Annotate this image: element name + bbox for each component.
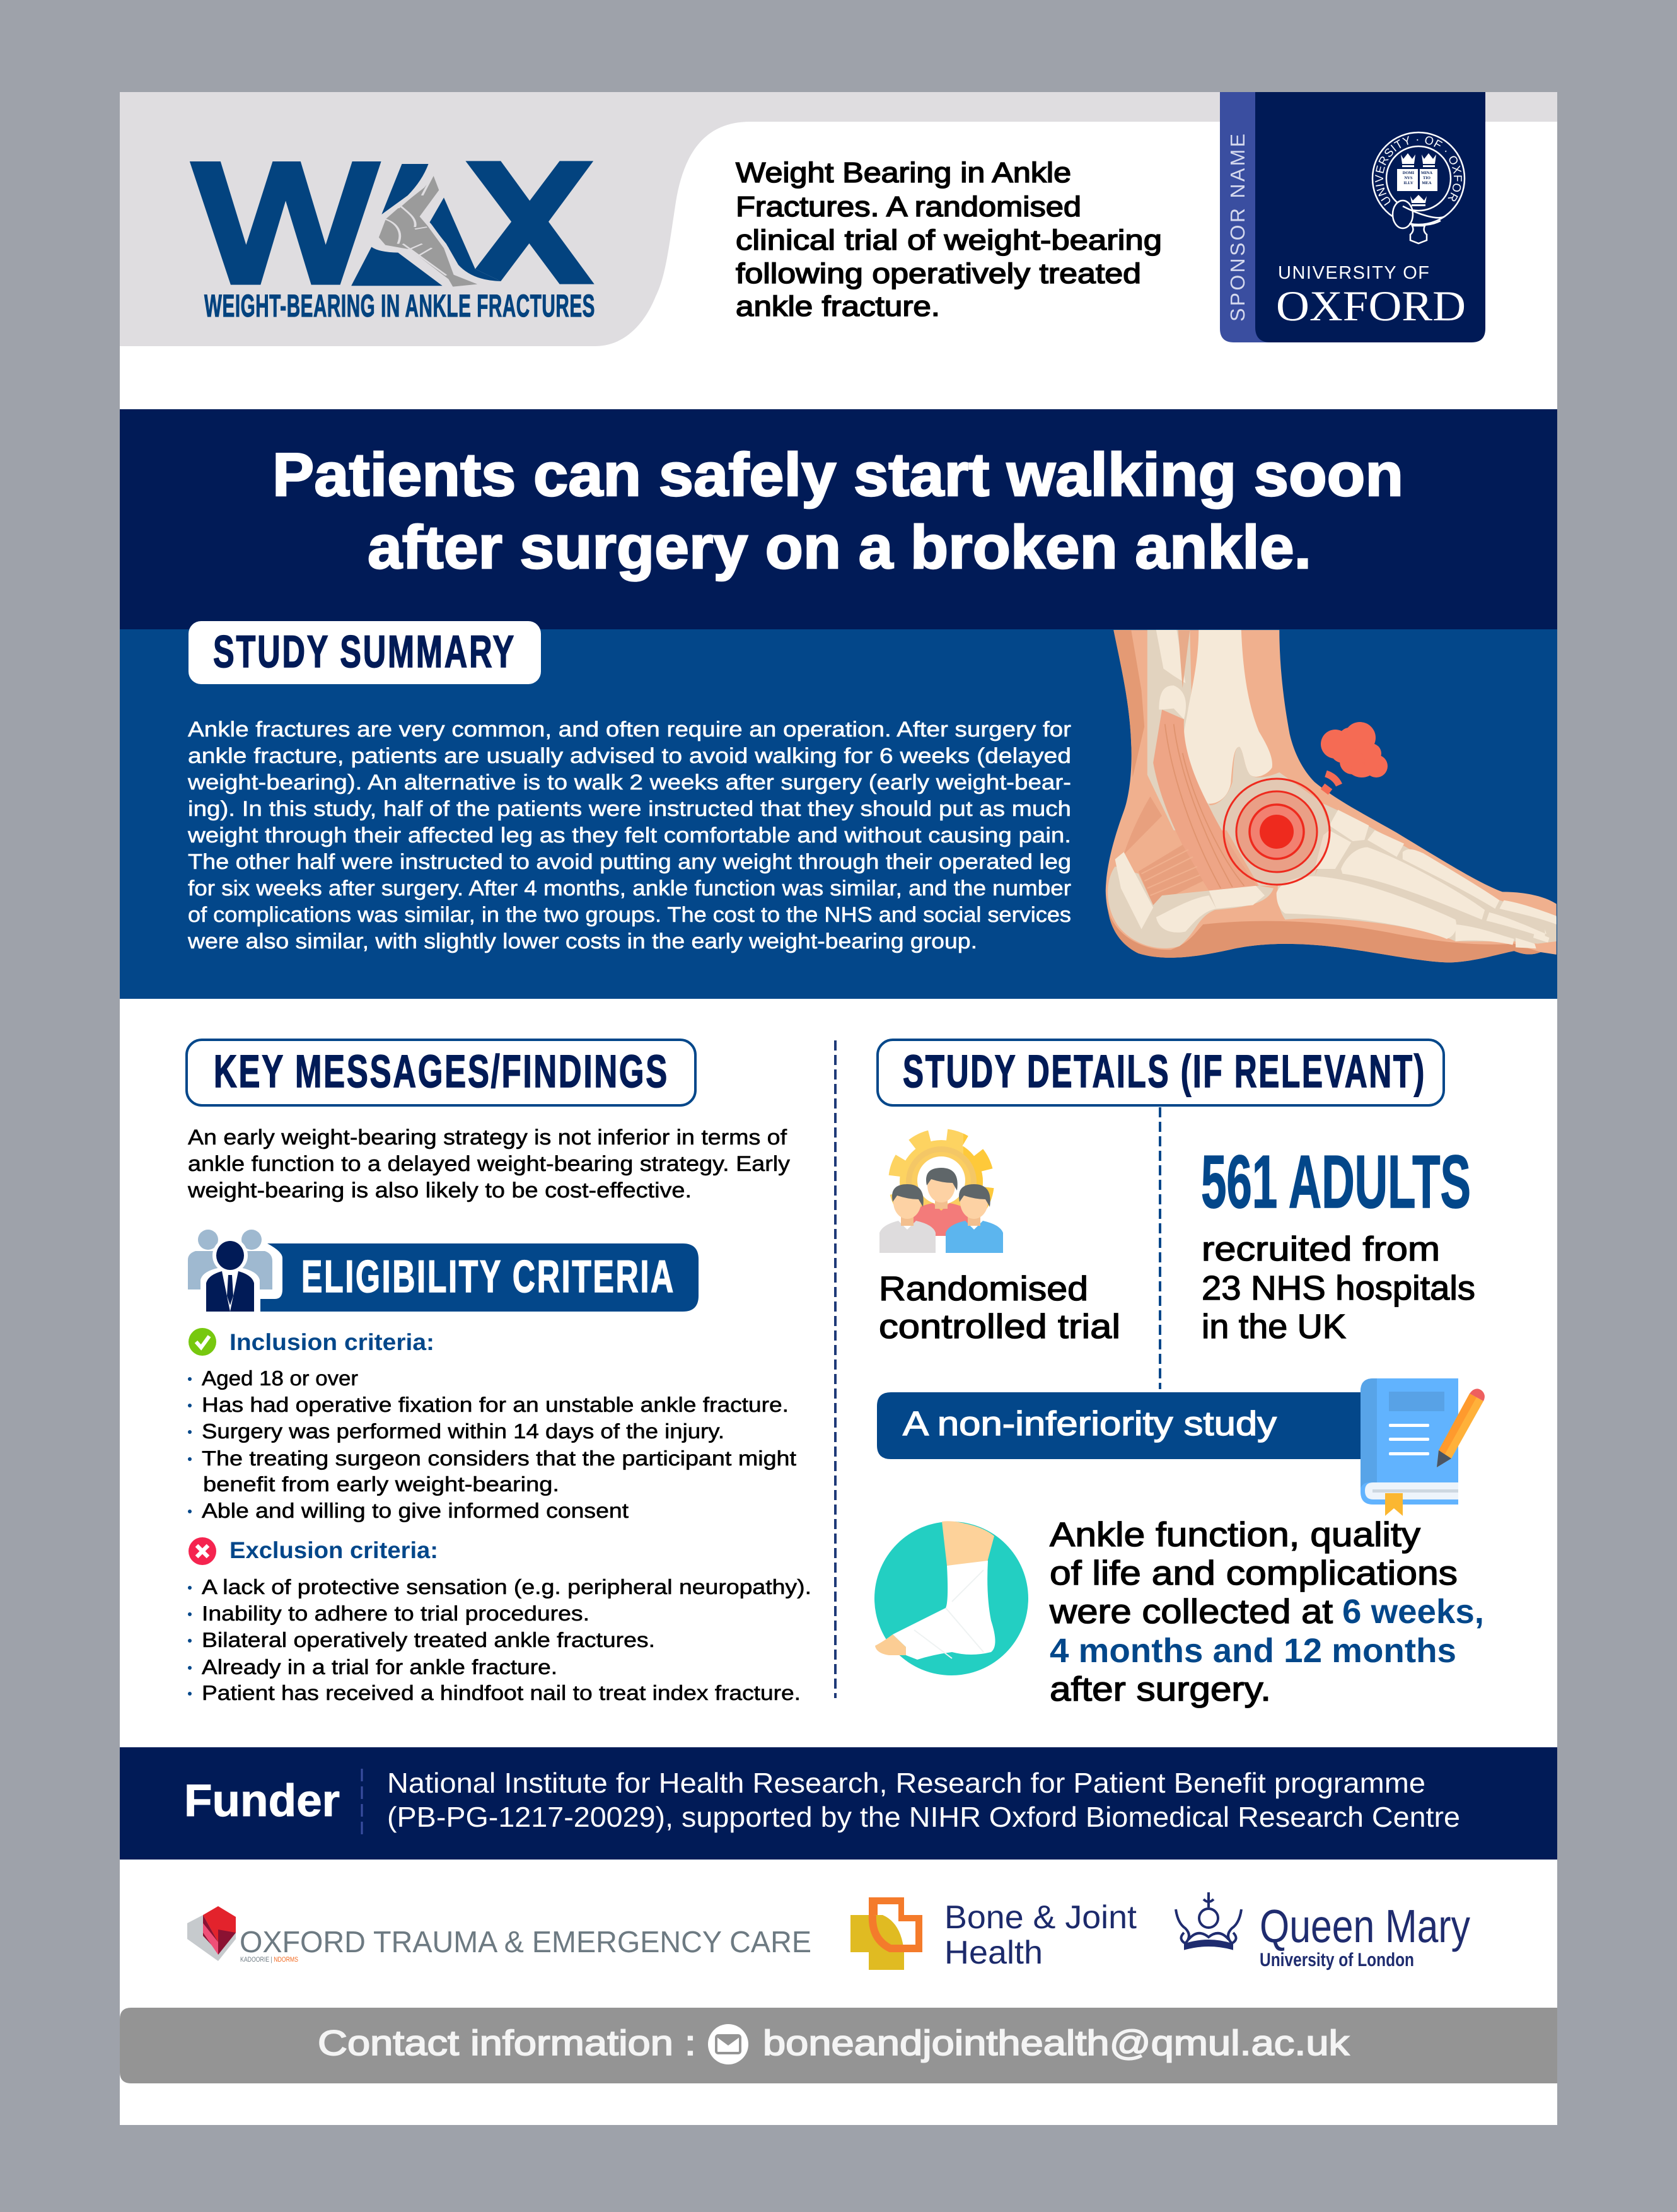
funder details: National Institute for Health Research, Research for Patient Benefit programme: [387, 1767, 1425, 1799]
icon: email: [708, 2024, 748, 2064]
inclusion criteria list: Able and willing to give informed consent: [202, 1499, 629, 1522]
pain cloud: [1321, 722, 1388, 792]
summary paragraph: were also similar, with slightly lower costs in the early weight-bearing group.: [187, 929, 977, 953]
summary paragraph: [187, 718, 1071, 953]
Oxford crest: MINA: [1421, 171, 1432, 175]
exclusion criteria heading: Exclusion criteria:: [229, 1537, 438, 1563]
study details heading: STUDY DETAILS (IF RELEVANT): [903, 1046, 1426, 1097]
inclusion criteria list: Surgery was performed within 14 days of the injury.: [202, 1419, 724, 1443]
QM crest: [1176, 1892, 1241, 1948]
recruitment text: 23 NHS hospitals: [1202, 1269, 1475, 1307]
funder details: (PB-PG-1217-20029), supported by the NIHR Oxford Biomedical Research Centre: [387, 1801, 1460, 1833]
summary paragraph: of complications was similar, in the two groups. The cost to the NHS and social services: [188, 903, 1071, 927]
trial title text: ankle fracture.: [736, 290, 940, 322]
icon: people group: [188, 1230, 272, 1315]
exclusion criteria list: Already in a trial for ankle fracture.: [202, 1655, 557, 1679]
recruitment text: recruited from: [1202, 1230, 1440, 1268]
eligibility criteria heading: [188, 1230, 699, 1315]
icon: bandaged ankle: [874, 1521, 1028, 1675]
sponsor name label: SPONSOR NAME: [1226, 134, 1249, 322]
key messages heading: KEY MESSAGES/FINDINGS: [214, 1046, 669, 1097]
header band: [120, 92, 1557, 346]
Oxford crest: TIO: [1423, 176, 1430, 180]
logo subtitle: WEIGHT-BEARING IN ANKLE FRACTURES: [204, 288, 595, 323]
summary background: [120, 629, 1557, 999]
exclusion criteria list: Inability to adhere to trial procedures.: [202, 1602, 589, 1625]
pain target rings: [1224, 779, 1330, 885]
summary paragraph: weight through their affected leg as they felt comfortable and without causing pain.: [187, 824, 1071, 847]
logo: Bone and Joint Health: [850, 1897, 1137, 1971]
outcomes text: 6 weeks,: [1342, 1593, 1484, 1631]
gear: [895, 1136, 987, 1228]
University of London wordmark: University of London: [1260, 1950, 1414, 1970]
white card: [120, 92, 1557, 2125]
stat: 561 adults: 561 ADULTS: [1201, 1140, 1471, 1224]
funder details: [387, 1767, 1460, 1833]
inclusion criteria list: benefit from early weight-bearing.: [203, 1472, 559, 1496]
Oxford crest: NVS: [1404, 176, 1413, 180]
non-inferiority banner: [877, 1392, 1368, 1459]
study summary panel: [120, 621, 1557, 999]
logo: Bone and Joint Health: Health: [944, 1935, 1043, 1971]
trial type label: [879, 1270, 1120, 1346]
exclusion criteria list: A lack of protective sensation (e.g. peripheral neuropathy).: [202, 1575, 811, 1598]
logo leg bones: [376, 172, 482, 288]
trial title text: following operatively treated: [736, 257, 1141, 289]
funder panel: [120, 1747, 1557, 1860]
eligibility bar: [260, 1243, 699, 1312]
recruitment text: in the UK: [1202, 1308, 1346, 1346]
logo letters: [190, 161, 595, 286]
foot anatomy illustration: [1106, 630, 1557, 962]
summary paragraph: weight-bearing). An alternative is to walk 2 weeks after surgery (early weight-bear-: [187, 771, 1071, 795]
exclusion criteria list: Bilateral operatively treated ankle fractures.: [202, 1628, 655, 1651]
trial type label: Randomised: [879, 1270, 1088, 1308]
centre person: [914, 1168, 969, 1236]
cross mark: [850, 1897, 922, 1970]
outcomes text: of life and complications: [1050, 1554, 1458, 1592]
Oxford crest: ILLV: [1403, 181, 1413, 185]
summary paragraph: for six weeks after surgery. After 4 months, ankle function was similar, and the number: [188, 876, 1071, 900]
bandage: [893, 1561, 995, 1660]
OTEC subtext: KADOORIE | NDORMS: [240, 1956, 298, 1964]
university of label: UNIVERSITY OF: [1278, 263, 1429, 283]
recruitment text: [1202, 1230, 1475, 1346]
study summary badge: [189, 621, 541, 684]
inclusion criteria list: Has had operative fixation for an unstable ankle fracture.: [202, 1393, 789, 1416]
details divider: [1159, 1107, 1161, 1389]
icon: red cross: [189, 1537, 216, 1565]
key messages text: weight-bearing is also likely to be cost-effective.: [187, 1179, 692, 1202]
Bone and Joint wordmark: Bone & Joint: [944, 1899, 1137, 1936]
outcomes text: were collected at: [1049, 1593, 1333, 1631]
summary paragraph: ing). In this study, half of the patients were instructed that they should put as much: [188, 797, 1071, 821]
trial title text: clinical trial of weight-bearing: [736, 224, 1162, 256]
outcomes text: 4 months and 12 months: [1050, 1632, 1456, 1670]
contact bar: [120, 2008, 1557, 2083]
eligibility title: ELIGIBILITY CRITERIA: [301, 1252, 675, 1302]
toes: [875, 1634, 906, 1655]
sponsor panel: University of Oxford: [1220, 92, 1485, 342]
hexagon mark: [187, 1906, 236, 1961]
WAX logo: [190, 161, 595, 323]
outcomes text: after surgery.: [1050, 1670, 1271, 1708]
Oxford wordmark: OXFORD: [1276, 282, 1466, 330]
left person: [879, 1184, 936, 1253]
trial title text: [736, 156, 1162, 322]
headline line 2: after surgery on a broken ankle.: [368, 513, 1311, 581]
summary paragraph: The other half were instructed to avoid putting any weight through their operated leg: [188, 850, 1071, 874]
inclusion criteria heading: Inclusion criteria:: [229, 1329, 434, 1355]
exclusion criteria list: [188, 1575, 811, 1704]
summary paragraph: Ankle fractures are very common, and often require an operation. After surgery for: [188, 718, 1071, 742]
summary paragraph: ankle fracture, patients are usually advised to avoid walking for 6 weeks (delayed: [188, 744, 1071, 768]
key messages text: ankle function to a delayed weight-bearing strategy. Early: [188, 1152, 790, 1176]
non-inferiority banner: A non-inferiority study: [903, 1405, 1277, 1443]
headline panel: [120, 409, 1557, 630]
trial title text: Fractures. A randomised: [736, 190, 1081, 223]
icon: green check: [189, 1328, 216, 1356]
Queen Mary wordmark: Queen Mary: [1260, 1900, 1470, 1952]
contact email: boneandjointhealth@qmul.ac.uk: [763, 2023, 1350, 2063]
study summary badge: STUDY SUMMARY: [213, 627, 516, 677]
inclusion criteria list: Aged 18 or over: [202, 1366, 358, 1390]
icon: book and pencil: [1361, 1378, 1485, 1516]
outcomes text: Ankle function, quality: [1050, 1516, 1420, 1554]
Oxford crest: MEA: [1422, 181, 1432, 185]
trial title text: Weight Bearing in Ankle: [736, 156, 1071, 189]
Oxford crest: DOMI: [1403, 171, 1415, 175]
icon: trial team with gear: [879, 1136, 1003, 1253]
logo: Queen Mary University of London: [1176, 1892, 1470, 1970]
funder label: Funder: [184, 1776, 340, 1826]
column divider: [834, 1040, 837, 1698]
Oxford crest: [1372, 131, 1465, 245]
sponsor strip: [1220, 92, 1274, 342]
key messages text: [187, 1126, 790, 1202]
sponsor main block: [1255, 92, 1485, 342]
inclusion criteria list: The treating surgeon considers that the participant might: [202, 1447, 796, 1470]
right person: [946, 1184, 1003, 1253]
foot skin and bones: [1106, 630, 1557, 962]
OTEC wordmark: OXFORD TRAUMA & EMERGENCY CARE: [240, 1926, 811, 1959]
headline line 1: Patients can safely start walking soon: [272, 440, 1403, 509]
key messages heading: [187, 1040, 695, 1105]
study details heading: [878, 1040, 1444, 1105]
leg: [942, 1521, 994, 1566]
trial type label: controlled trial: [879, 1308, 1120, 1346]
outcomes text: [1049, 1516, 1484, 1708]
inclusion criteria list: [188, 1366, 796, 1522]
logo: Oxford Trauma and Emergency Care: [187, 1906, 811, 1964]
exclusion criteria list: Patient has received a hindfoot nail to treat index fracture.: [202, 1681, 801, 1704]
key messages text: An early weight-bearing strategy is not inferior in terms of: [188, 1126, 787, 1150]
headline background: [120, 409, 1557, 630]
contact label: Contact information :: [318, 2023, 696, 2063]
